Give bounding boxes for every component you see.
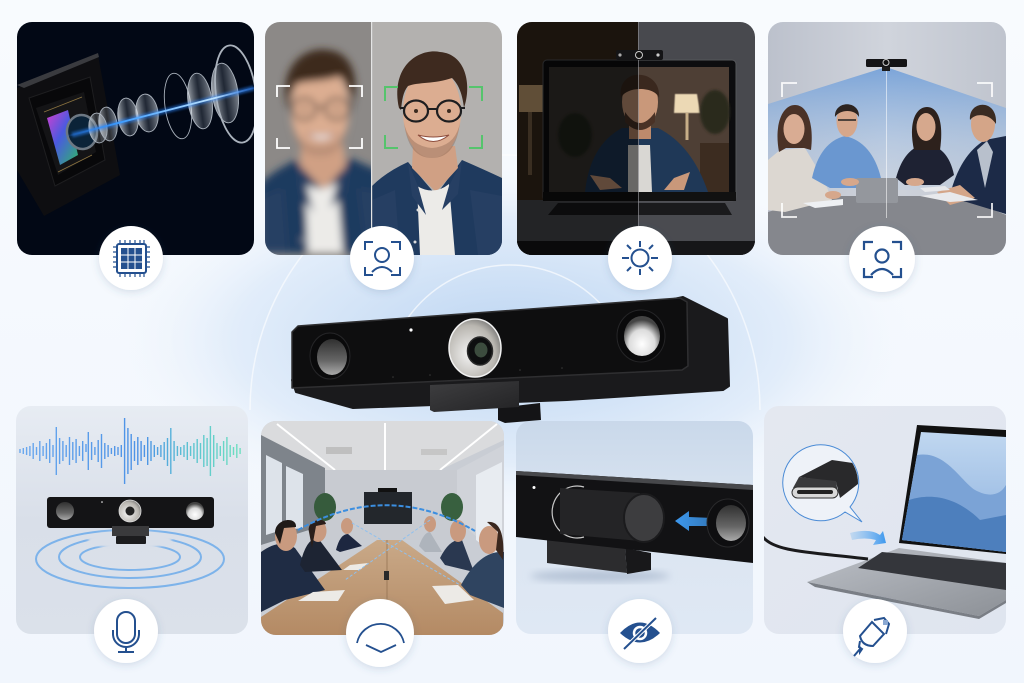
sound waveform xyxy=(20,418,240,484)
cable xyxy=(763,537,868,559)
left speaker xyxy=(310,333,350,379)
white focus brackets xyxy=(277,86,362,148)
rings xyxy=(36,530,224,588)
sharp person xyxy=(372,51,502,255)
green focus brackets xyxy=(385,87,482,148)
person 3 xyxy=(896,107,954,185)
shutter xyxy=(552,486,664,542)
icon: face scan xyxy=(350,226,414,290)
mount xyxy=(530,540,670,582)
background lamp xyxy=(519,85,543,175)
back wall xyxy=(334,470,442,471)
stand xyxy=(430,381,541,423)
bar body xyxy=(516,471,753,563)
icon: sun xyxy=(608,226,672,290)
callout bubble xyxy=(783,445,862,522)
arrow xyxy=(675,511,713,531)
split line xyxy=(638,22,639,226)
panel: microphone pickup xyxy=(16,406,248,634)
lens stack xyxy=(65,43,263,151)
USB-C plug xyxy=(792,460,860,498)
icon: processor chip xyxy=(99,226,163,290)
mini webcam on laptop xyxy=(616,50,663,60)
panel: image sensor and lens stack xyxy=(17,22,263,255)
right wall xyxy=(457,445,504,560)
mini webcam xyxy=(866,59,907,71)
panel: face clarity before and after xyxy=(260,22,502,255)
center lens xyxy=(449,319,501,377)
video person xyxy=(585,75,708,192)
windows xyxy=(261,435,325,545)
main webcam product xyxy=(292,297,729,423)
front face xyxy=(292,298,688,388)
table xyxy=(261,540,503,635)
dimming overlay left half xyxy=(517,22,638,255)
panel: low light correction xyxy=(517,22,755,255)
right speaker xyxy=(617,310,665,362)
laptop xyxy=(807,425,1006,619)
laptop xyxy=(543,60,736,215)
mini webcam xyxy=(47,497,214,544)
central glow with arcs xyxy=(112,155,912,515)
panel: privacy shutter xyxy=(516,421,753,634)
plants xyxy=(314,493,463,521)
curved arrow xyxy=(850,531,886,545)
person 2 xyxy=(812,104,881,188)
body side and underside xyxy=(292,297,729,408)
shadow under mount xyxy=(88,531,172,549)
papers xyxy=(298,563,474,604)
framing brackets xyxy=(782,83,992,217)
panel: conference room xyxy=(261,421,504,635)
microphone beam arcs xyxy=(298,505,475,531)
person 4 xyxy=(937,105,1006,214)
left attendees xyxy=(261,518,362,612)
sensor module xyxy=(17,53,120,216)
coverage cone xyxy=(768,68,1006,178)
icon: usb plug xyxy=(843,599,907,663)
display and bar xyxy=(364,488,412,524)
divider line xyxy=(371,22,372,255)
icon: wide field arc xyxy=(346,599,414,667)
speaker xyxy=(707,499,749,547)
panel: USB-C connection xyxy=(763,406,1006,634)
ceiling xyxy=(261,421,504,470)
vertical line xyxy=(886,66,887,218)
indicator dots xyxy=(392,328,563,378)
table xyxy=(768,196,1006,255)
icon: microphone xyxy=(94,599,158,663)
person 1 xyxy=(768,105,832,212)
panel: group auto framing xyxy=(768,22,1006,255)
blurred person xyxy=(265,44,371,255)
right attendees xyxy=(419,516,504,608)
table items and hands xyxy=(803,178,978,208)
icon: group framing face scan xyxy=(849,226,915,292)
icon: privacy eye off xyxy=(608,599,672,663)
light beam xyxy=(60,88,254,138)
